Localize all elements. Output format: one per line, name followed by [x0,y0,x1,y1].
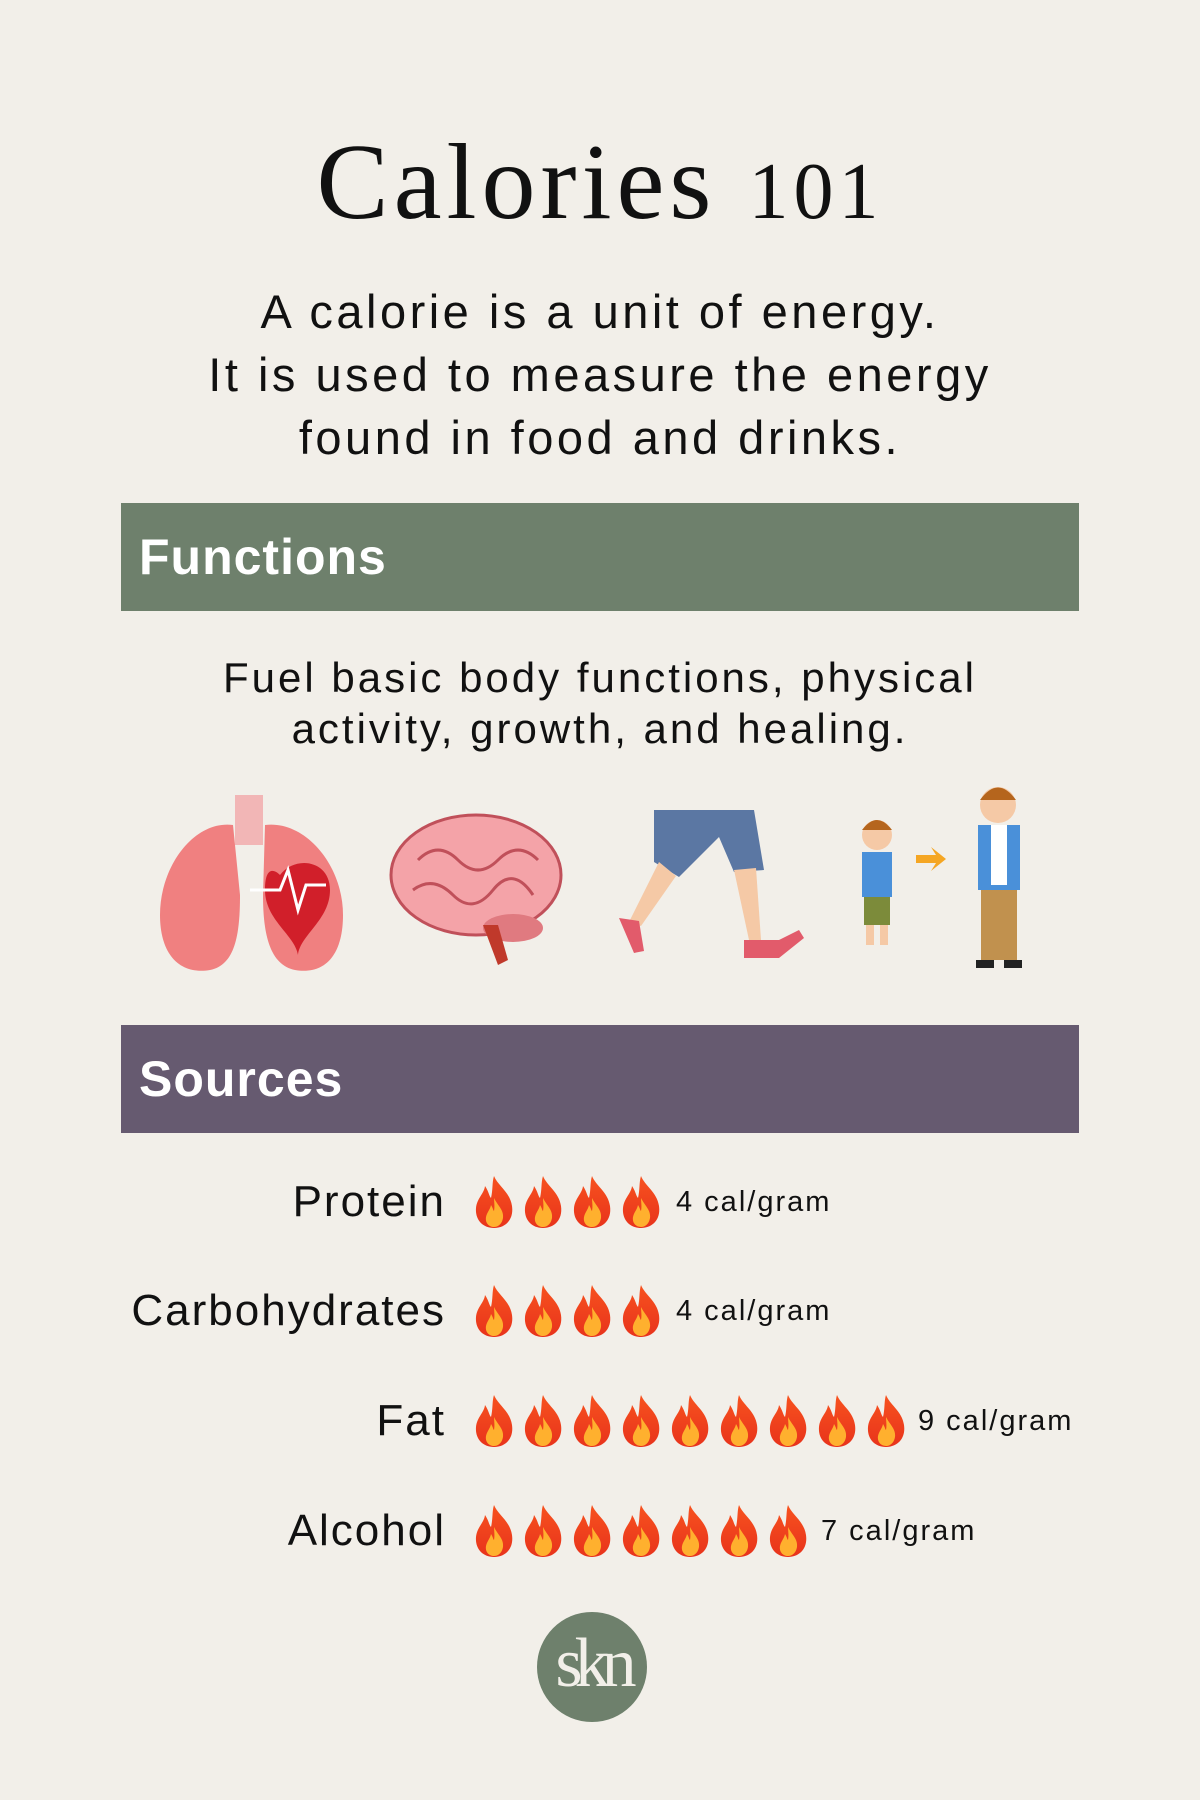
row: carbohydrates: Carbohydrates [131,1286,446,1335]
intro text: A calorie is a unit of energy. [261,285,939,338]
row: protein [293,1176,831,1228]
row: alcohol: Alcohol [288,1506,446,1555]
intro text: found in food and drinks. [299,411,901,464]
logo [537,1612,647,1722]
row: alcohol: 7 cal/gram [821,1515,976,1547]
row: protein: 4 cal/gram [676,1186,831,1218]
icon: child growing to adult [862,787,1022,968]
row: carbohydrates: 4 cal/gram [676,1295,831,1327]
intro text [208,285,992,464]
icon: walking legs [619,810,804,958]
functions text: Fuel basic body functions, physical [223,654,977,701]
functions text [223,654,977,752]
row: alcohol [288,1505,976,1557]
icon: lungs and heart [160,795,343,971]
row: protein: Protein [293,1177,446,1226]
row: fat [376,1395,1073,1447]
heading: Sources: Sources [139,1051,343,1107]
heading: Sources [121,1025,1079,1133]
intro text: It is used to measure the energy [208,348,992,401]
icons row [160,787,1022,971]
heading: Functions: Functions [139,529,387,585]
row: fat: 9 cal/gram [918,1405,1073,1437]
logo: skn [555,1625,629,1702]
icon: brain [390,814,562,965]
heading: Functions [121,503,1079,611]
functions text: activity, growth, and healing. [292,705,908,752]
title: Calories 101 [317,123,883,242]
row: fat: Fat [376,1396,446,1445]
row: carbohydrates [131,1285,831,1337]
